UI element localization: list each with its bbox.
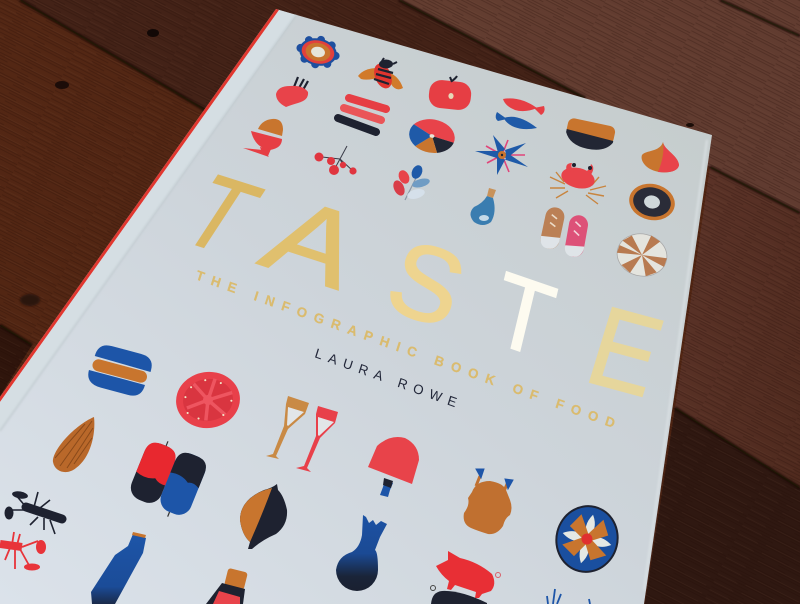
icon: sausages	[338, 98, 386, 132]
icon: pink bread	[563, 214, 589, 258]
icon: fig	[642, 142, 679, 172]
icon: leaf sprig	[391, 164, 431, 201]
icon: small bottle	[206, 568, 248, 604]
icon: flower plate	[546, 498, 628, 580]
icon: crab	[550, 163, 606, 204]
icon: flower	[297, 35, 339, 69]
title: TASTE: E	[575, 283, 676, 421]
icon: blue bottle	[91, 532, 146, 604]
icon: blue fish	[496, 112, 537, 129]
icon: berries	[314, 146, 357, 175]
icon: pastry	[564, 117, 616, 154]
icon: blue drumstick	[470, 188, 496, 225]
icon: apple	[428, 76, 472, 111]
icon: doughnut	[626, 180, 678, 224]
title: TASTE: S	[373, 217, 479, 351]
icon: egg cup	[243, 119, 283, 157]
icon: tomato	[172, 368, 244, 432]
icon: dark pig	[430, 586, 487, 604]
author: LAURA ROWE	[313, 346, 459, 410]
icon: onion	[240, 484, 287, 549]
icon: bee	[358, 58, 403, 91]
icon: pie wheel	[406, 116, 457, 157]
icon: beetroot	[276, 77, 308, 107]
icon: dark lobster	[4, 490, 62, 534]
icon: blue and dark capsule	[155, 449, 209, 523]
icon: red and dark capsule	[127, 435, 181, 507]
icon: almond	[53, 417, 94, 472]
icon: burger	[85, 342, 154, 399]
title: TASTE: A	[245, 176, 383, 311]
title: TASTE	[162, 155, 676, 421]
icon: red fish	[503, 98, 545, 115]
icon: red lobster	[0, 532, 46, 570]
icon: fennel bulb	[336, 515, 387, 591]
title: TASTE: T	[483, 249, 565, 380]
icon: red peel shape	[368, 437, 419, 497]
icon: striped wheel	[613, 229, 671, 281]
icon: orange glass	[266, 396, 309, 459]
icon: red glass	[296, 406, 338, 472]
icon: red pig	[436, 551, 500, 598]
icon: baguette	[539, 206, 566, 251]
subtitle: THE INFOGRAPHIC BOOK OF FOOD	[194, 268, 617, 431]
title: TASTE: T	[162, 155, 279, 273]
icon: roast chicken	[464, 469, 513, 534]
icon: star flower	[475, 135, 528, 175]
icon: blue plant	[547, 589, 590, 604]
